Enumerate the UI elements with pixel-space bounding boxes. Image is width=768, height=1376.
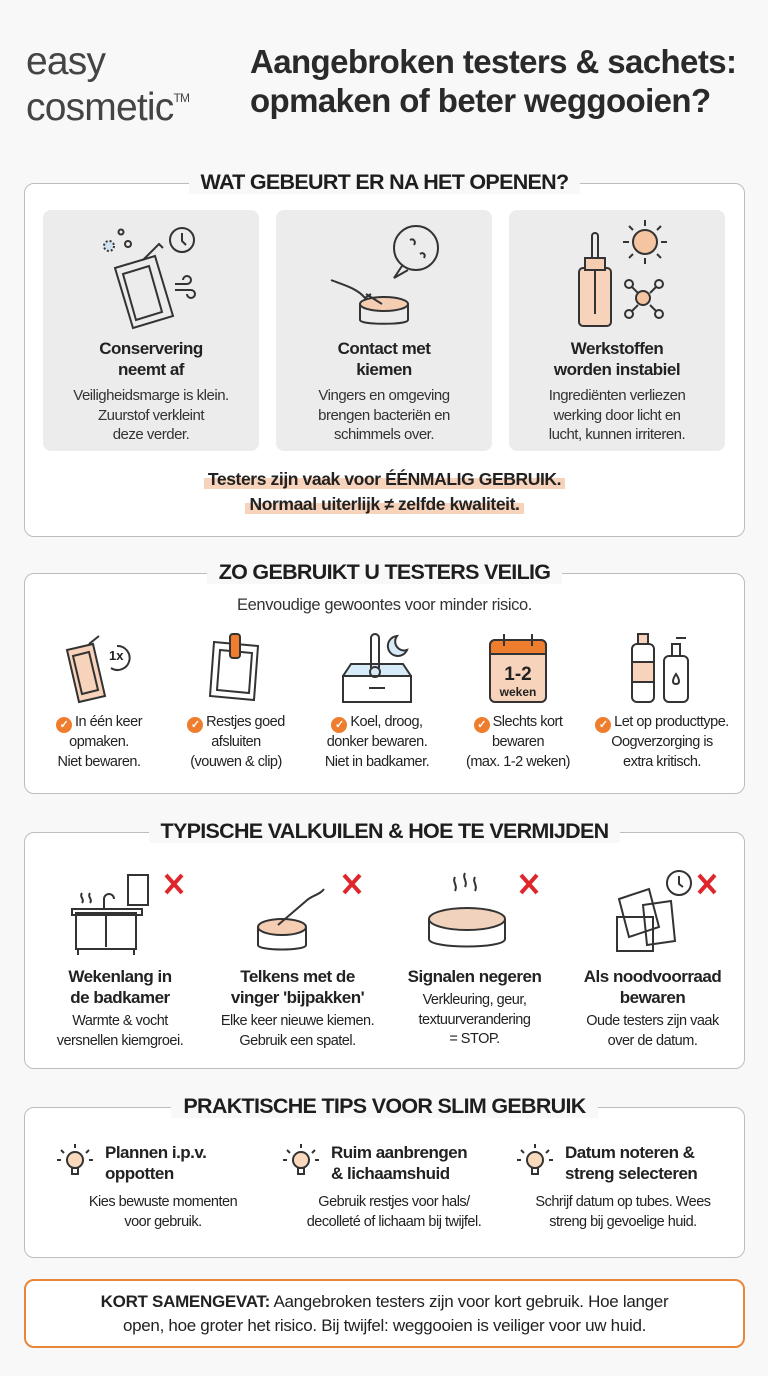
item: product type: extra kritisch.: [623, 754, 701, 770]
summary box: KORT SAMENGEVAT: Aangebroken testers zijn voor kort gebruik. Hoe langer: [101, 1292, 668, 1311]
icon: old sachets X: [616, 870, 716, 952]
item: short: ✓: [477, 719, 486, 731]
card: conservering: Zuurstof verkleint: [98, 406, 204, 424]
panel: practical tips: streng selecteren: [565, 1164, 697, 1183]
pitfall: bathroom: [56, 874, 184, 1048]
item: seal: ✓: [191, 719, 200, 731]
icon: sachet 1x: [66, 635, 131, 704]
heading: WAT GEBEURT ER NA HET OPENEN?: [201, 170, 568, 194]
pitfall: finger: Gebruik een spatel.: [239, 1032, 356, 1048]
icon: spoiled cream X: [428, 872, 538, 948]
panel: practical tips: & lichaamshuid: [331, 1164, 450, 1183]
item: product type: Oogverzorging is: [611, 734, 713, 750]
item: product type: ✓: [599, 719, 608, 731]
item: seal: [187, 633, 285, 770]
heading: PRAKTISCHE TIPS VOOR SLIM GEBRUIK: [183, 1094, 586, 1118]
item: short: Slechts kort: [493, 714, 562, 730]
pitfall: bathroom: versnellen kiemgroei.: [57, 1032, 183, 1048]
pitfall: finger: Telkens met de: [240, 967, 355, 986]
panel: practical tips: Gebruik restjes voor hals/: [318, 1194, 470, 1210]
icon: sink with X: [71, 874, 184, 955]
item: product type: Let op producttype.: [614, 714, 729, 730]
heading: TYPISCHE VALKUILEN & HOE TE VERMIJDEN: [161, 819, 608, 843]
item: cool dry: Niet in badkamer.: [325, 754, 429, 770]
card: conservering: deze verder.: [113, 426, 189, 443]
summary box: [24, 1279, 745, 1348]
panel: what happens after opening: [24, 183, 745, 537]
item: seal: (vouwen & clip): [190, 754, 282, 770]
heading: ZO GEBRUIKT U TESTERS VEILIG: [219, 560, 550, 584]
pitfall: stock: bewaren: [620, 988, 685, 1007]
icon: bottles: [631, 633, 689, 703]
logo: cosmeticTM: [26, 86, 189, 129]
summary box: open, hoe groter het risico. Bij twijfel: weggooien is veiliger voor uw huid.: [123, 1316, 646, 1335]
icon: bulb: [283, 1144, 319, 1175]
icon: dropper bottle + sun: [578, 220, 667, 327]
icon: finger in jar: [330, 225, 439, 325]
card: conservering: neemt af: [118, 360, 184, 379]
card: kiemen: kiemen: [356, 360, 412, 379]
panel: practical tips: oppotten: [105, 1164, 174, 1183]
title: opmaken of beter weggooien?: [250, 82, 711, 119]
icon: drawer thermometer moon: [342, 633, 412, 703]
item: cool dry: Koel, droog,: [350, 714, 423, 730]
item: product type: [595, 633, 729, 770]
title: [250, 43, 736, 119]
pitfall: bathroom: de badkamer: [70, 988, 170, 1007]
callout: single use: [204, 469, 565, 514]
icon: calendar 1-2 weken: [489, 634, 547, 703]
card: kiemen: schimmels over.: [334, 426, 434, 443]
card: werkstoffen: Ingrediënten verliezen: [549, 387, 685, 404]
pitfall: bathroom: Wekenlang in: [68, 967, 172, 986]
pitfall: stock: over de datum.: [608, 1032, 697, 1048]
panel: practical tips: streng bij gevoelige huid.: [549, 1214, 697, 1230]
item: once: ✓: [60, 719, 68, 731]
item: once: In één keer: [75, 714, 142, 730]
subtitle: Eenvoudige gewoontes voor minder risico.: [237, 596, 532, 614]
item: once: [56, 635, 142, 770]
card: werkstoffen: [509, 210, 725, 451]
callout: single use: Normaal uiterlijk ≠ zelfde kwaliteit.: [249, 494, 520, 514]
panel: practical tips: voor gebruik.: [124, 1214, 202, 1230]
panel: practical tips: Datum noteren &: [565, 1143, 694, 1162]
pitfall: signals: Signalen negeren: [408, 967, 541, 986]
title: Aangebroken testers & sachets:: [250, 43, 736, 80]
pitfall: stock: [584, 870, 721, 1048]
pitfall: finger: Elke keer nieuwe kiemen.: [221, 1013, 374, 1029]
pitfall: signals: textuurverandering: [419, 1012, 530, 1028]
icon: bulb: [517, 1144, 553, 1175]
item: short: bewaren: [492, 734, 544, 750]
icon: sachet 1x: 1x: [109, 648, 124, 663]
card: kiemen: Contact met: [338, 339, 430, 358]
item: cool dry: donker bewaren.: [327, 734, 427, 750]
item: once: Niet bewaren.: [58, 754, 140, 770]
pitfall: stock: Oude testers zijn vaak: [586, 1013, 719, 1029]
card: conservering: Conservering: [99, 339, 203, 358]
item: seal: Restjes goed: [206, 714, 285, 730]
pitfall: stock: Als noodvoorraad: [584, 967, 721, 986]
icon: finger jar X: [257, 874, 362, 950]
callout: single use: Testers zijn vaak voor ÉÉNMALIG GEBRUIK.: [208, 469, 561, 489]
pitfall: signals: Verkleuring, geur,: [423, 992, 526, 1008]
card: kiemen: brengen bacteriën en: [318, 406, 450, 424]
icon: calendar 1-2 weken: weken: [499, 685, 536, 699]
pitfall: finger: [221, 874, 374, 1048]
panel: practical tips: decolleté of lichaam bij twijfel.: [307, 1214, 481, 1230]
tip 3: [517, 1143, 711, 1230]
card: werkstoffen: werking door licht en: [553, 406, 681, 424]
item: seal: afsluiten: [211, 734, 261, 750]
panel: practical tips: [24, 1107, 745, 1258]
panel: practical tips: Plannen i.p.v.: [105, 1143, 206, 1162]
item: once: opmaken.: [69, 734, 129, 750]
card: conservering: Veiligheidsmarge is klein.: [73, 387, 229, 404]
panel: practical tips: Schrijf datum op tubes. Wees: [535, 1194, 711, 1210]
card: werkstoffen: lucht, kunnen irriteren.: [549, 426, 685, 443]
pitfall: signals: [408, 872, 541, 1047]
icon: calendar 1-2 weken: 1-2: [504, 664, 532, 685]
panel: pitfalls: [24, 832, 745, 1069]
pitfall: finger: vinger 'bijpakken': [231, 988, 364, 1007]
icon: bulb: [57, 1144, 93, 1175]
item: cool dry: [325, 633, 429, 770]
card: werkstoffen: worden instabiel: [554, 360, 680, 379]
panel: practical tips: Ruim aanbrengen: [331, 1143, 467, 1162]
pitfall: bathroom: Warmte & vocht: [72, 1013, 168, 1029]
icon: clipped sachet: [208, 633, 260, 702]
tip 2: [283, 1143, 481, 1230]
icon: opened sachet: [103, 227, 196, 330]
card: werkstoffen: Werkstoffen: [571, 339, 663, 358]
pitfall: signals: = STOP.: [449, 1031, 500, 1047]
logo: easy: [26, 40, 105, 83]
card: conservering: [43, 210, 259, 451]
card: kiemen: [276, 210, 492, 451]
item: short: [466, 634, 570, 770]
item: cool dry: ✓: [335, 719, 344, 731]
card: kiemen: Vingers en omgeving: [318, 387, 450, 404]
panel: practical tips: Kies bewuste momenten: [89, 1194, 237, 1210]
tip 1: [57, 1143, 237, 1230]
panel: safe use: [24, 573, 745, 794]
item: short: (max. 1-2 weken): [466, 754, 570, 770]
logo: [26, 40, 189, 129]
